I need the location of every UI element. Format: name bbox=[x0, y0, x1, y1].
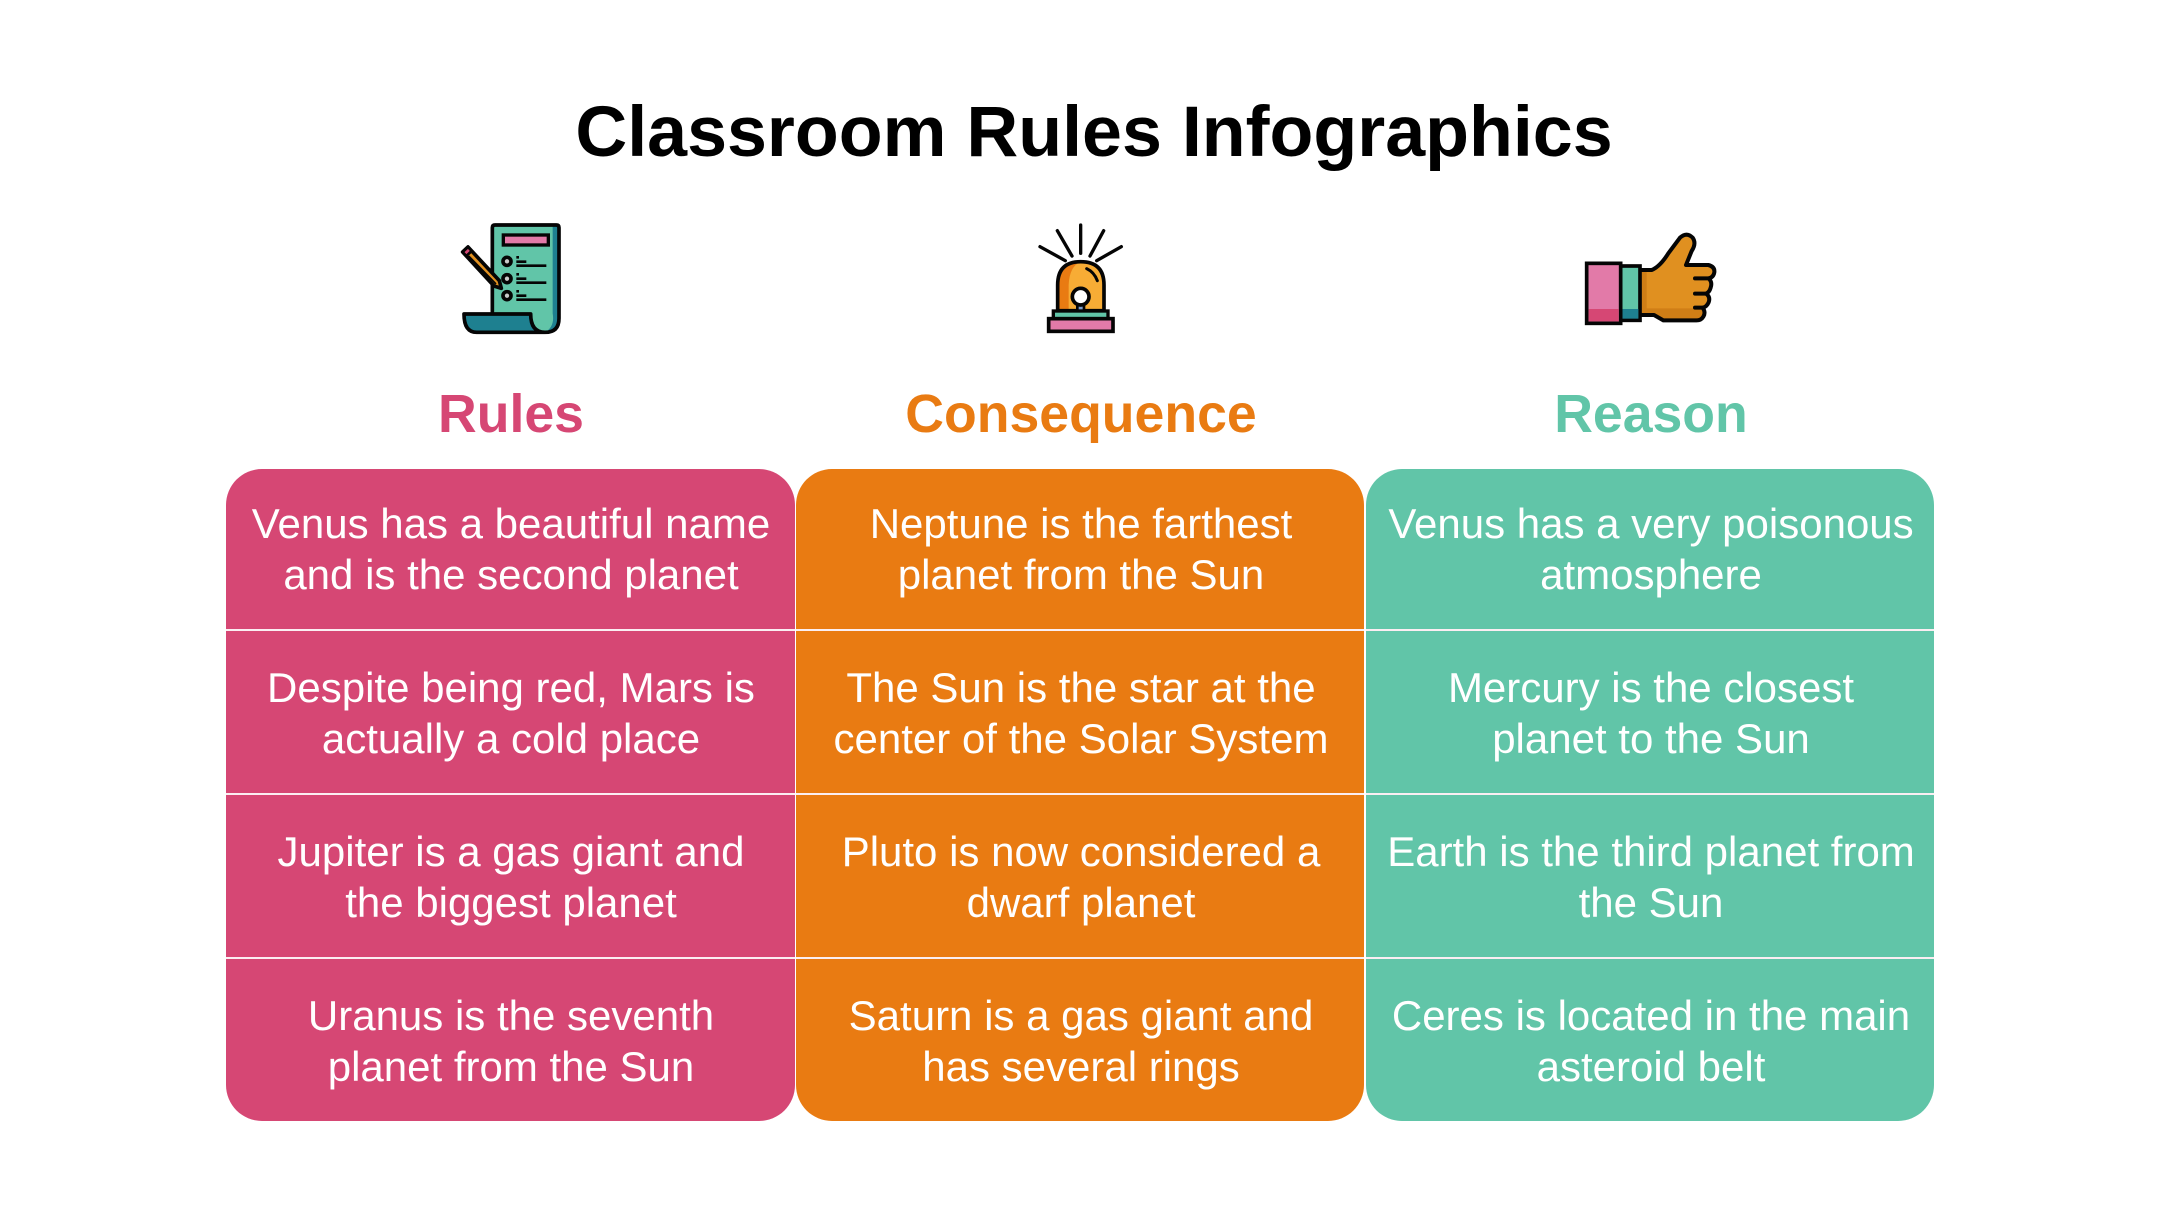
title: Classroom Rules Infographics bbox=[575, 92, 1613, 172]
reason 2 text: Mercury is the closest bbox=[1448, 664, 1854, 711]
reason 1 text: atmosphere bbox=[1540, 550, 1762, 598]
reason 2 text: planet to the Sun bbox=[1492, 714, 1810, 762]
rule 1 text: and is the second planet bbox=[283, 550, 739, 598]
reason 4 text: asteroid belt bbox=[1537, 1042, 1765, 1090]
rule 3 text: Jupiter is a gas giant and bbox=[278, 828, 744, 875]
rule 4 text: Uranus is the seventh bbox=[308, 992, 714, 1039]
consequence 4 text: has several rings bbox=[922, 1042, 1240, 1090]
rule 4 text bbox=[308, 992, 714, 1090]
heading: Consequence: Consequence bbox=[905, 384, 1257, 444]
reason 4 text: Ceres is located in the main bbox=[1392, 992, 1910, 1039]
rule 3 text: the biggest planet bbox=[345, 878, 677, 926]
icon: thumbs up bbox=[1584, 232, 1716, 326]
reason 1 text bbox=[1388, 500, 1914, 598]
reason 3 text: Earth is the third planet from bbox=[1387, 828, 1915, 875]
consequence 2 text: center of the Solar System bbox=[834, 714, 1328, 762]
heading: Rules: Rules bbox=[438, 384, 584, 444]
icon: checklist with pencil bbox=[460, 223, 561, 334]
panel: reason column bbox=[1366, 469, 1934, 1121]
consequence 1 text: planet from the Sun bbox=[898, 550, 1264, 598]
rule 1 text bbox=[252, 500, 770, 598]
consequence 3 text bbox=[842, 828, 1320, 926]
consequence 1 text bbox=[870, 500, 1292, 598]
consequence 3 text: Pluto is now considered a bbox=[842, 828, 1320, 875]
rule 4 text: planet from the Sun bbox=[328, 1042, 694, 1090]
reason 3 text: the Sun bbox=[1579, 878, 1723, 926]
consequence 1 text: Neptune is the farthest bbox=[870, 500, 1292, 547]
rule 2 text: Despite being red, Mars is bbox=[267, 664, 755, 711]
panel: rules column bbox=[226, 469, 795, 1121]
panel: consequence column bbox=[796, 469, 1364, 1121]
rule 1 text: Venus has a beautiful name bbox=[252, 500, 770, 547]
consequence 2 text bbox=[834, 664, 1328, 762]
consequence 3 text: dwarf planet bbox=[967, 878, 1195, 926]
consequence 4 text bbox=[849, 992, 1313, 1090]
reason 2 text bbox=[1448, 664, 1854, 762]
reason 1 text: Venus has a very poisonous bbox=[1388, 500, 1914, 547]
rule 2 text: actually a cold place bbox=[322, 714, 700, 762]
reason 3 text bbox=[1387, 828, 1915, 926]
consequence 2 text: The Sun is the star at the bbox=[846, 664, 1316, 711]
heading: Reason: Reason bbox=[1554, 384, 1748, 444]
reason 4 text bbox=[1392, 992, 1910, 1090]
consequence 4 text: Saturn is a gas giant and bbox=[849, 992, 1313, 1039]
rule 2 text bbox=[267, 664, 755, 762]
icon: siren alarm bbox=[1038, 223, 1124, 334]
rule 3 text bbox=[278, 828, 744, 926]
